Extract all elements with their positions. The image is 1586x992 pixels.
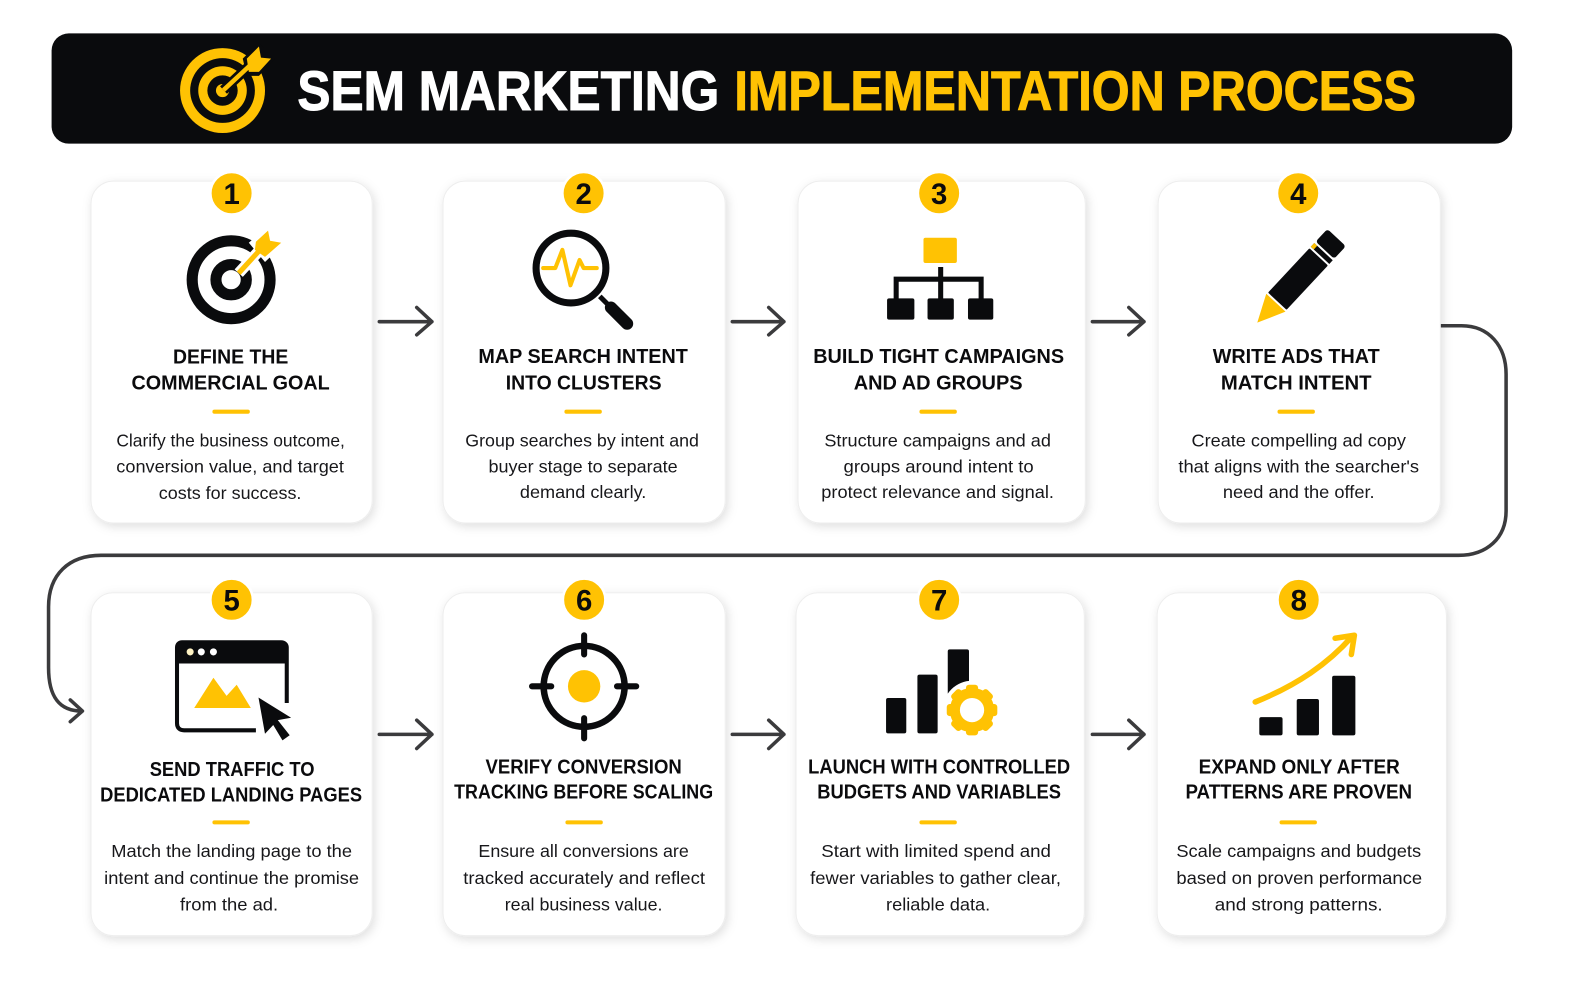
- description: from the ad.: [180, 894, 278, 914]
- description: need and the offer.: [1223, 482, 1375, 502]
- description: [463, 841, 705, 914]
- badge 6: 6: [576, 584, 592, 617]
- arrow: step 7 to 8: [1092, 720, 1144, 749]
- description: [465, 431, 699, 502]
- description: [1176, 841, 1422, 914]
- panel: step 6: [443, 579, 725, 936]
- description: Create compelling ad copy: [1192, 431, 1406, 451]
- heading: WRITE ADS THAT: [1213, 346, 1380, 368]
- badge 6: [563, 579, 605, 621]
- description: fewer variables to gather clear,: [810, 868, 1061, 888]
- description: based on proven performance: [1176, 868, 1422, 888]
- title: IMPLEMENTATION PROCESS: [734, 60, 1416, 122]
- description: Ensure all conversions are: [478, 841, 689, 861]
- icon: target and dart: [192, 225, 285, 319]
- icon: growth bars with arrow: [1255, 635, 1355, 735]
- description: Scale campaigns and budgets: [1176, 841, 1421, 861]
- header banner: [52, 33, 1512, 144]
- badge 2: 2: [575, 178, 592, 211]
- arrow: step 6 to 7: [732, 720, 784, 749]
- panel: step 7: [796, 579, 1084, 936]
- title: SEM MARKETING: [297, 60, 719, 122]
- description: Start with limited spend and: [821, 841, 1051, 861]
- heading: SEND TRAFFIC TO: [150, 759, 315, 781]
- description: demand clearly.: [520, 482, 646, 502]
- heading: AND AD GROUPS: [854, 372, 1023, 394]
- badge 7: [918, 579, 960, 621]
- panel: step 5: [91, 579, 372, 936]
- heading: [478, 346, 688, 394]
- description: [104, 841, 359, 914]
- description: groups around intent to: [844, 456, 1034, 476]
- panel: step 4: [1158, 172, 1440, 523]
- badge 4: [1277, 172, 1319, 214]
- heading: [454, 756, 713, 804]
- panel: step 2: [443, 172, 725, 523]
- icon: browser window with cursor: [175, 640, 293, 741]
- description: conversion value, and target: [116, 456, 344, 476]
- heading: [1185, 756, 1412, 804]
- icon: header target with arrow: [180, 43, 275, 133]
- panel: step 1: [91, 172, 372, 523]
- badge 1: 1: [223, 178, 240, 211]
- description: reliable data.: [886, 894, 990, 914]
- badge 2: [562, 172, 605, 214]
- title: [297, 60, 1416, 122]
- heading: BUILD TIGHT CAMPAIGNS: [813, 346, 1064, 368]
- panel: step 8: [1157, 579, 1446, 936]
- description: Group searches by intent and: [465, 431, 699, 451]
- heading: [1213, 346, 1380, 394]
- badge 1: [210, 172, 253, 214]
- description: Clarify the business outcome,: [116, 431, 345, 451]
- heading: INTO CLUSTERS: [506, 372, 662, 394]
- description: [810, 841, 1061, 914]
- heading: BUDGETS AND VARIABLES: [817, 782, 1061, 804]
- description: protect relevance and signal.: [821, 482, 1054, 502]
- heading: MATCH INTENT: [1221, 372, 1372, 394]
- badge 7: 7: [931, 584, 947, 617]
- description: costs for success.: [159, 483, 301, 503]
- panel: step 3: [798, 172, 1085, 523]
- description: [116, 431, 345, 503]
- badge 3: 3: [931, 178, 947, 211]
- badge 3: [918, 172, 960, 214]
- arrow: step 1 to 2: [379, 308, 432, 335]
- description: Match the landing page to the: [111, 841, 352, 861]
- heading: [100, 759, 362, 807]
- heading: [813, 346, 1064, 394]
- description: [821, 431, 1054, 502]
- heading: DEFINE THE: [173, 347, 288, 369]
- icon: org chart: [887, 238, 993, 320]
- heading: VERIFY CONVERSION: [486, 756, 682, 778]
- description: that aligns with the searcher's: [1178, 456, 1419, 476]
- badge 5: 5: [223, 584, 240, 617]
- heading: COMMERCIAL GOAL: [131, 372, 330, 394]
- description: intent and continue the promise: [104, 868, 359, 888]
- icon: magnifier with pulse: [536, 233, 627, 324]
- arrow: step 2 to 3: [732, 308, 784, 335]
- description: [1178, 431, 1419, 502]
- arrow: step 5 to 6: [379, 720, 432, 749]
- heading: EXPAND ONLY AFTER: [1199, 756, 1400, 778]
- badge 8: 8: [1291, 584, 1307, 617]
- heading: [808, 756, 1070, 804]
- heading: [131, 347, 330, 394]
- heading: PATTERNS ARE PROVEN: [1185, 782, 1412, 804]
- heading: TRACKING BEFORE SCALING: [454, 782, 713, 804]
- icon: bars and gear: [886, 649, 1001, 739]
- badge 8: [1277, 579, 1320, 621]
- heading: DEDICATED LANDING PAGES: [100, 785, 362, 807]
- description: buyer stage to separate: [489, 456, 678, 476]
- description: Structure campaigns and ad: [824, 431, 1051, 451]
- icon: pencil: [1248, 229, 1346, 332]
- badge 5: [210, 579, 253, 621]
- badge 4: 4: [1290, 178, 1307, 211]
- heading: LAUNCH WITH CONTROLLED: [808, 756, 1070, 778]
- arrow: step 3 to 4: [1092, 308, 1144, 335]
- icon: crosshair: [532, 635, 636, 738]
- description: real business value.: [505, 894, 663, 914]
- description: and strong patterns.: [1215, 894, 1383, 914]
- arrow: connector from row one to row two: [49, 326, 1506, 722]
- description: tracked accurately and reflect: [463, 868, 705, 888]
- heading: MAP SEARCH INTENT: [478, 346, 688, 368]
